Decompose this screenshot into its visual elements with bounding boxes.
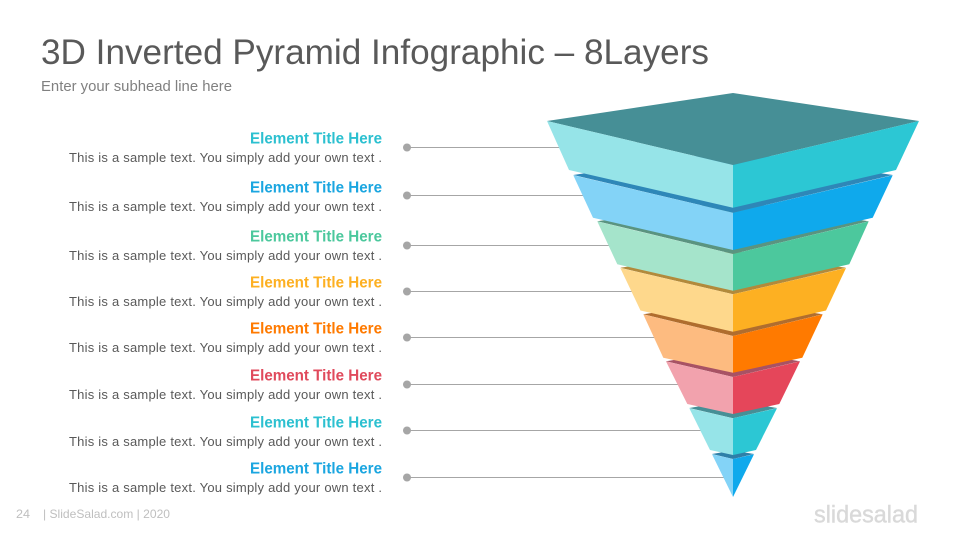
element 3 text: Element Title Here	[250, 228, 382, 246]
element 7 text: This is a sample text. You simply add your own text .	[69, 434, 382, 449]
element 8 text	[69, 460, 382, 495]
element 3 text: This is a sample text. You simply add your own text .	[69, 248, 382, 263]
element 4 text: Element Title Here	[250, 274, 382, 292]
element 1 text	[69, 130, 382, 165]
element 7 text: Element Title Here	[250, 414, 382, 432]
text blocks	[69, 130, 382, 495]
element 4 text: This is a sample text. You simply add your own text .	[69, 294, 382, 309]
layer 7	[689, 400, 777, 455]
element 2 text: Element Title Here	[250, 180, 382, 196]
element 1 text: This is a sample text. You simply add your own text .	[69, 150, 382, 165]
element 1 text: Element Title Here	[250, 130, 382, 148]
layer 2	[573, 150, 893, 250]
inverted pyramid	[547, 93, 919, 497]
layer 6	[666, 350, 800, 414]
element 7 text	[69, 414, 382, 449]
element 5 text: Element Title Here	[250, 320, 382, 338]
element 4 text	[69, 274, 382, 309]
connector lines	[403, 144, 728, 482]
element 2 text: This is a sample text. You simply add your own text .	[69, 199, 382, 214]
subhead: Enter your subhead line here	[41, 78, 232, 95]
element 5 text: This is a sample text. You simply add your own text .	[69, 340, 382, 355]
footer: | SlideSalad.com | 2020	[43, 507, 170, 521]
element 8 text: This is a sample text. You simply add your own text .	[69, 480, 382, 495]
element 2 text	[69, 180, 382, 214]
layer 5	[643, 300, 823, 373]
element 6 text: Element Title Here	[250, 368, 382, 384]
element 3 text	[69, 228, 382, 263]
logo: slidesalad	[814, 502, 918, 528]
layer 1	[547, 93, 919, 208]
element 6 text	[69, 368, 382, 402]
layer 8	[712, 450, 754, 497]
element 8 text: Element Title Here	[250, 460, 382, 478]
element 5 text	[69, 320, 382, 355]
title: 3D Inverted Pyramid Infographic – 8Layers	[41, 32, 709, 72]
element 6 text: This is a sample text. You simply add your own text .	[69, 387, 382, 402]
layer 4	[620, 250, 846, 332]
layer 3	[597, 200, 869, 291]
footer: 24	[16, 507, 30, 521]
